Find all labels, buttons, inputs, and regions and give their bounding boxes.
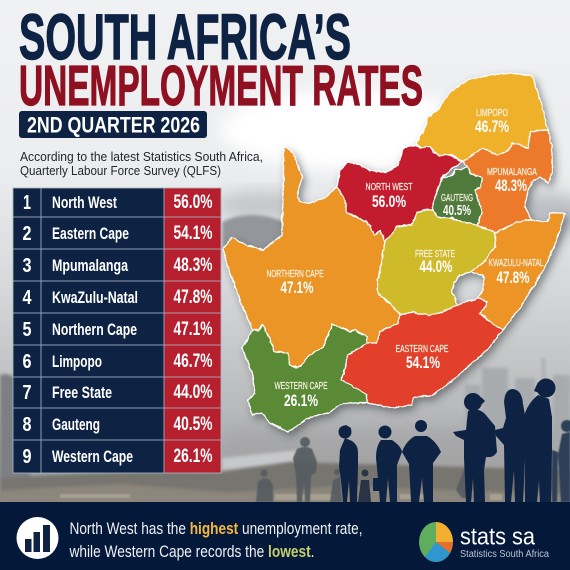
icon: bar chart in circle [16,517,58,559]
row 5: Northern Cape [52,320,137,339]
footer message: North West has the highest unemployment rate, [70,520,362,538]
person right with ponytail [536,378,556,398]
row 9 [22,446,213,468]
row 1: North West [52,193,117,212]
person long hair [495,389,525,502]
source text [20,150,263,178]
logo wordmark [460,524,549,560]
logo wordmark: stats sa [460,524,536,550]
title: SOUTH AFRICA’S [19,1,351,73]
person hands on hips [415,420,427,432]
title [19,1,423,118]
person with shoulder bag [378,426,392,438]
row 6 [22,351,213,373]
label: Limpopo: LIMPOPO [476,107,508,119]
row 1 [23,192,213,214]
row 8: 40.5% [174,414,213,435]
row 7: Free State [52,383,112,402]
silhouettes of people [256,378,570,502]
province: Mpumalanga [463,130,552,233]
row 6: Limpopo [52,352,102,371]
label: Gauteng: 40.5% [443,202,471,219]
row 8 [22,414,213,436]
province: KwaZulu-Natal [470,213,565,330]
province: Free State [377,210,495,315]
person with backpack and phone [464,393,482,411]
map labels [266,107,544,410]
row 2: 2 [22,223,32,245]
row 5: 5 [22,319,32,341]
row 1: 56.0% [174,192,213,213]
far right figure [552,420,570,502]
row 4: 47.8% [174,287,213,308]
label: Mpumalanga [487,166,537,195]
label: Limpopo [475,107,509,136]
footer message [69,520,363,561]
row 7 [22,382,213,404]
row 9: 26.1% [174,446,213,467]
row 2 [22,223,213,245]
row 3: Mpumalanga [52,256,128,275]
row 6: 6 [22,351,32,373]
label: Limpopo: 46.7% [475,117,509,136]
map of South Africa [223,73,565,432]
row 2: Eastern Cape [52,224,129,243]
row 9: Western Cape [52,447,133,466]
province: Limpopo [416,73,548,162]
person head down [338,426,352,438]
row 7: 7 [22,382,32,404]
province: Northern Cape [223,147,400,368]
quarter badge: 2ND QUARTER 2026 [27,112,200,138]
label: Northern Cape: 47.1% [280,278,314,297]
row 7: 44.0% [174,382,213,403]
province: Gauteng [433,167,482,225]
label: Mpumalanga: MPUMALANGA [487,166,537,178]
row 4: KwaZulu-Natal [52,288,138,307]
row 2: 54.1% [174,223,213,244]
label: KwaZulu-Natal [488,257,544,287]
label: Eastern Cape [396,343,448,372]
label: KwaZulu-Natal: 47.8% [496,268,530,287]
row 3: 48.3% [174,255,213,276]
logo: stats sa pie [419,522,453,562]
row 4 [22,287,213,309]
row 6: 46.7% [174,351,213,372]
label: North West: NORTH WEST [366,181,413,193]
label: Free State [415,248,455,276]
label: Eastern Cape: 54.1% [406,353,440,372]
label: Western Cape [274,380,328,410]
child figure [358,470,371,502]
row 5: 47.1% [174,319,213,340]
row 8: 8 [22,414,32,436]
footer message: while Western Cape records the lowest. [69,543,315,561]
row 8: Gauteng [52,415,100,434]
source text: Quarterly Labour Force Survey (QLFS) [20,164,221,178]
label: North West: 56.0% [372,192,406,211]
source text: According to the latest Statistics South Africa, [20,150,263,164]
label: Mpumalanga: 48.3% [495,176,527,195]
row 3 [22,255,213,277]
logo wordmark: Statistics South Africa [460,549,549,560]
label: Northern Cape [266,268,324,297]
faded background figures [256,437,472,502]
province: North West [337,145,462,242]
label: North West [366,181,413,211]
row 1: 1 [23,192,31,214]
province: Western Cape [242,325,367,432]
label: Free State: 44.0% [420,257,452,276]
label: Eastern Cape: EASTERN CAPE [396,343,448,355]
row 4: 4 [22,287,32,309]
row 9: 9 [22,446,32,468]
label: Free State: FREE STATE [415,248,455,260]
province: Eastern Cape [342,298,503,408]
label: Western Cape: 26.1% [284,391,318,410]
label: Western Cape: WESTERN CAPE [274,380,328,392]
ranking table [13,188,221,473]
label: Northern Cape: NORTHERN CAPE [266,268,324,280]
row 5 [22,319,213,341]
label: Gauteng: GAUTENG [441,192,473,204]
row 3: 3 [22,255,32,277]
footer band [0,502,570,570]
label: Gauteng [441,192,473,219]
